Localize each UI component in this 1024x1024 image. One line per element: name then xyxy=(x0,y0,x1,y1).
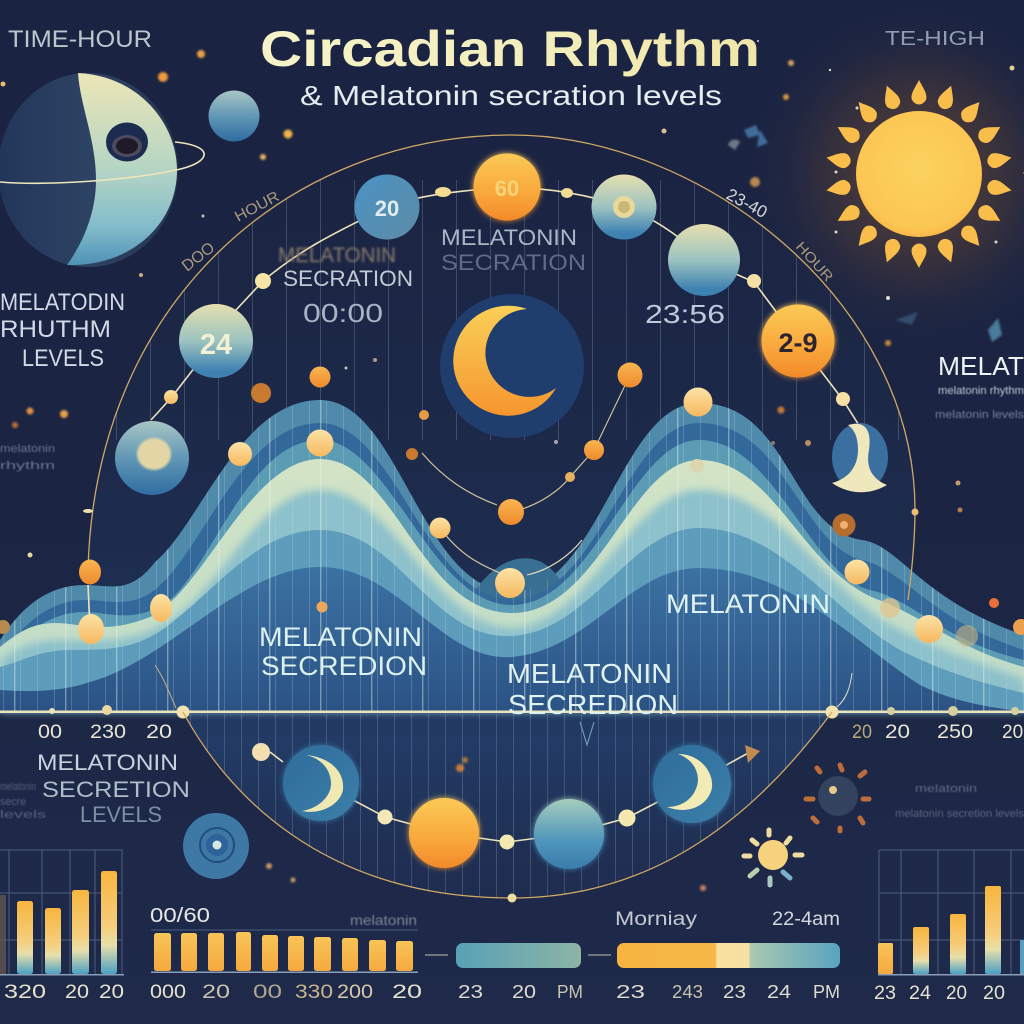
text block: melatonin secretion levels: SECRETION xyxy=(42,777,190,802)
axis labels: 20 xyxy=(146,722,172,743)
right bars labels: 24 xyxy=(909,983,931,1004)
blurred side notes: melatonin secretion levels xyxy=(895,808,1024,820)
blurred side notes: melatonin xyxy=(915,783,977,795)
label: te-high: TE-HIGH xyxy=(885,28,985,50)
text block: melatonin secredion centre xyxy=(507,658,678,720)
icon: central crescent moon xyxy=(440,294,584,438)
chart: melatonin wave xyxy=(0,400,1024,714)
wave layer: light blue xyxy=(0,490,1024,712)
icon: small dim sun xyxy=(806,765,869,831)
label: melatonin small: melatonin xyxy=(350,912,417,928)
text block: melatodin rhythm levels: MELATODIN xyxy=(0,289,125,316)
middle bars labels xyxy=(150,982,422,1003)
text block: melatonin secretion levels xyxy=(37,750,190,827)
axis labels: 20 xyxy=(1002,722,1023,743)
label: 00/60: 00/60 xyxy=(150,905,210,927)
wave layer: teal band xyxy=(0,440,1024,712)
middle bars labels: 00 xyxy=(253,982,282,1003)
planet: 60: 60 xyxy=(495,176,519,201)
icon: large sun xyxy=(825,80,1013,268)
wave grid lines xyxy=(0,400,1024,712)
title: Circadian Rhythm xyxy=(260,21,760,77)
left bars labels: 20 xyxy=(65,982,89,1003)
progress labels: PM xyxy=(813,982,840,1002)
axis labels: 00 xyxy=(38,722,62,743)
text block: melatodin rhythm levels xyxy=(0,289,125,372)
wave layer: outer band xyxy=(0,400,1024,712)
icon: distant shapes xyxy=(728,125,1002,342)
planet: pale eclipse xyxy=(592,174,656,240)
text block: melatonin secredion left: SECREDION xyxy=(261,651,427,681)
curved hour labels: DOO xyxy=(179,239,218,275)
blurred side notes: melatonin rhythm xyxy=(938,385,1024,397)
curved hour labels xyxy=(179,185,837,285)
planet: 20: 20 xyxy=(375,196,399,221)
progress labels xyxy=(458,982,840,1002)
planet: 20 xyxy=(354,174,420,240)
progress bar: teal xyxy=(456,943,581,968)
text block: melatonin secretion levels: MELATONIN xyxy=(37,750,178,775)
middle bars labels: 000 xyxy=(150,982,186,1003)
middle bars labels: 200 xyxy=(337,982,373,1003)
middle bars labels: 20 xyxy=(202,982,230,1003)
grid lines above waves xyxy=(88,180,918,440)
curved hour labels: HOUR xyxy=(232,188,282,226)
text block: melatonin secredion centre: MELATONIN xyxy=(507,658,672,689)
axis labels: 230 xyxy=(90,722,126,743)
progress labels: 23 xyxy=(723,982,746,1002)
chart: left bars xyxy=(0,850,124,976)
planet: lower blue xyxy=(534,799,604,869)
axis labels: 250 xyxy=(937,722,973,743)
planet: lower left crescent xyxy=(283,745,359,821)
nodes on orbit and curves xyxy=(0,187,1024,902)
text block: melatonin secration centre: SECRATION xyxy=(441,250,586,275)
curved hour labels: 23-40 xyxy=(723,185,770,222)
label: melatonin right wave: MELATONIN xyxy=(666,589,830,619)
left bars labels xyxy=(4,982,124,1003)
text block: melatonin secretion levels: LEVELS xyxy=(80,802,162,827)
icon: target circle xyxy=(183,813,249,879)
progress labels: 24 xyxy=(767,982,791,1002)
progress labels: 23 xyxy=(616,982,645,1002)
text block: secration 00:00: 00:00 xyxy=(303,298,383,328)
right bars labels: 20 xyxy=(946,983,967,1004)
blurred side notes: levels xyxy=(0,809,47,821)
text block: melatonin secredion centre: SECREDION xyxy=(508,689,678,720)
icon: small bright sun xyxy=(744,830,802,885)
left bars labels: 20 xyxy=(99,982,124,1003)
text block: melatonin secredion left xyxy=(259,622,427,681)
blurred side notes xyxy=(0,385,1024,821)
left bars grid xyxy=(0,850,122,974)
orbit planets xyxy=(115,154,888,869)
label: 23:56: 23:56 xyxy=(645,299,725,329)
left bars labels: 320 xyxy=(4,982,46,1003)
blurred side notes: melatonin xyxy=(0,781,36,793)
sun glow xyxy=(744,0,1024,349)
icon: top-left moon planet xyxy=(0,73,204,267)
planet: lower orange xyxy=(409,798,479,868)
planet: 24 xyxy=(179,304,253,378)
planet: 24: 24 xyxy=(200,329,232,361)
right bars labels: 23 xyxy=(874,983,896,1004)
blurred side notes: melatonin levels xyxy=(935,409,1024,421)
axis labels xyxy=(38,722,1023,743)
planet: right crescent xyxy=(832,423,888,492)
right bars labels: 20 xyxy=(983,983,1005,1004)
right bars labels xyxy=(874,983,1005,1004)
wave layer: pale crest xyxy=(0,459,1024,712)
text block: melatodin rhythm levels: RHUTHM xyxy=(0,316,111,343)
planet: 2-9: 2-9 xyxy=(778,328,818,358)
axis line xyxy=(0,705,1024,718)
label: 22-4am: 22-4am xyxy=(772,909,840,930)
middle bars frame xyxy=(151,929,418,931)
progress labels: 20 xyxy=(512,982,536,1002)
wave layer: dark band xyxy=(0,423,1024,712)
chart: middle bars xyxy=(151,930,418,973)
text block: secration 00:00: MELATONIN xyxy=(278,244,396,267)
dash connectors xyxy=(425,954,611,956)
planet: pale blue xyxy=(668,224,740,296)
planet: 60 xyxy=(474,154,540,220)
progress labels: PM xyxy=(557,982,583,1002)
grid lines below axis xyxy=(190,714,820,897)
wave layer: mid blue xyxy=(0,528,1024,712)
curved hour labels: HOUR xyxy=(793,238,837,285)
chart: right bars xyxy=(878,850,1024,976)
icon: small blue planet xyxy=(208,90,260,142)
text block: melatonin secration centre: MELATONIN xyxy=(441,225,577,250)
subtitle: & Melatonin secration levels xyxy=(300,80,722,111)
planet: cloud xyxy=(115,421,189,495)
planet: 2-9 xyxy=(762,304,834,378)
axis labels: 20 xyxy=(885,722,910,743)
label: time-hour: TIME-HOUR xyxy=(8,26,152,53)
text block: melatonin secredion left: MELATONIN xyxy=(259,622,422,652)
progress labels: 243 xyxy=(672,982,703,1002)
orbit ring xyxy=(88,135,915,898)
blurred side notes: rhythm xyxy=(0,460,55,472)
text block: melatonin secration centre xyxy=(441,225,586,275)
inner circle tint xyxy=(88,135,915,898)
axis labels: 20 xyxy=(852,722,872,743)
blurred side notes: melatonin xyxy=(0,443,55,455)
label: melat right: MELAT xyxy=(938,351,1024,381)
text block: melatodin rhythm levels: LEVELS xyxy=(22,345,104,372)
planet: lower right crescent xyxy=(653,745,731,823)
text block: secration 00:00 xyxy=(278,244,413,328)
wave layer: centre dome xyxy=(470,558,560,620)
label: morniay: Morniay xyxy=(615,909,698,930)
middle bars labels: 20 xyxy=(392,982,422,1003)
blurred side notes: secre xyxy=(0,796,26,808)
right bars grid xyxy=(879,850,1024,974)
wave layer: deep blue xyxy=(0,567,1024,714)
progress bar: morning xyxy=(617,943,840,968)
text block: secration 00:00: SECRATION xyxy=(283,266,413,291)
progress labels: 23 xyxy=(458,982,483,1002)
orbit connectors xyxy=(88,187,862,842)
middle bars labels: 330 xyxy=(295,982,333,1003)
